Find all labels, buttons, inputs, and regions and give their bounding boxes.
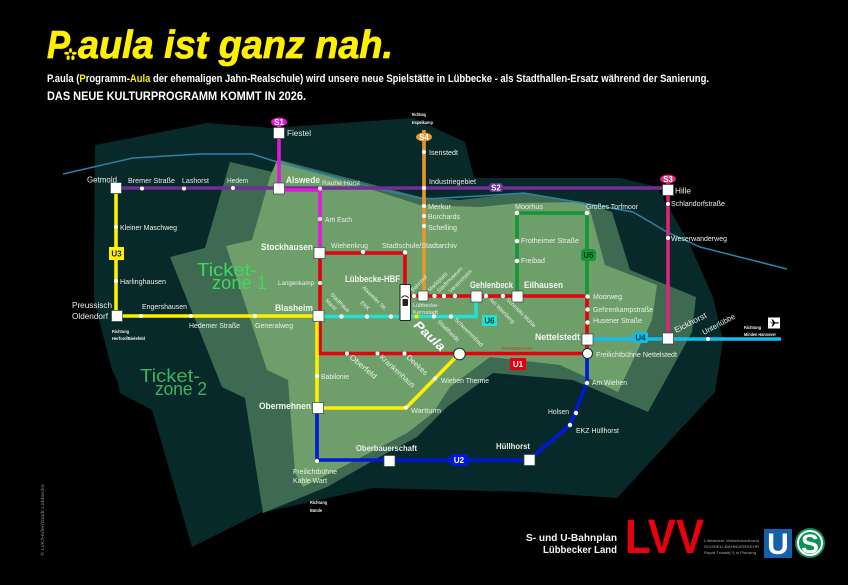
- stations on the western lines: [114, 186, 590, 463]
- label: ticket zone 2: Ticket-: [140, 366, 200, 386]
- operator text: Lübbecker Verkehrsverbund: [704, 538, 759, 543]
- station labels centre: Stadtmuseum: [436, 266, 465, 294]
- map name: [526, 533, 617, 556]
- station labels west: Kleiner Maschweg: [120, 223, 177, 232]
- station labels east: [496, 292, 776, 451]
- station labels centre: Wiehenkrug: [331, 241, 368, 250]
- station labels centre: Deekes: [405, 353, 430, 377]
- station labels west: Lashorst: [182, 176, 210, 185]
- station labels west: Stockhausen: [261, 242, 313, 252]
- station labels east: Gehrenkampstraße: [593, 305, 653, 314]
- map name: Lübbecker Land: [543, 545, 617, 556]
- station labels centre: Am Weinberg: [488, 297, 515, 325]
- station labels centre: Krankenhaus: [378, 353, 417, 390]
- station labels centre: Wiehen Therme: [441, 376, 489, 385]
- label: ticket zone 1: Ticket-: [197, 260, 257, 280]
- station labels centre: Stadthaus: [329, 292, 351, 314]
- line S1 magenta: S1: [274, 118, 284, 127]
- station labels east: Unterlübbe: [701, 312, 737, 337]
- station labels west: Obermehnen: [259, 401, 311, 411]
- operator text: [704, 538, 759, 555]
- line S4 orange: [412, 112, 477, 296]
- line U5 green: Moorhus: [515, 202, 543, 211]
- line U1 red: [320, 253, 587, 370]
- station labels centre: Lübbecke-HBF: [345, 274, 401, 284]
- station labels centre: Vereinsheim: [448, 268, 474, 294]
- station labels west: Herford/Bielefeld: [112, 336, 145, 341]
- station labels centre: Eilhausen: [524, 280, 563, 290]
- interchange stations: [110, 128, 674, 466]
- icon: Lübbecke main station with train: [400, 284, 410, 320]
- station labels centre: Gehlenbeck: [470, 280, 513, 290]
- station labels centre: Wartturm: [411, 406, 441, 415]
- station labels west: Kahle Wart: [293, 476, 328, 485]
- label: ticket zone 1: [197, 260, 267, 293]
- line S4 orange: Merkur: [428, 202, 451, 211]
- station labels east: Nettelstedt: [535, 332, 580, 342]
- line S4 orange: S4: [419, 133, 429, 142]
- title: P: [47, 24, 71, 67]
- title: aula ist ganz nah.: [78, 24, 393, 67]
- line U2 blue: U2: [454, 456, 465, 465]
- station labels west: Freilichtbühne: [293, 467, 337, 476]
- station labels centre: Markt: [324, 298, 338, 312]
- station labels west: Bremer Straße: [128, 176, 175, 185]
- station labels west: [72, 129, 360, 513]
- station labels east: Husener Straße: [593, 316, 642, 325]
- line U3 yellow: [109, 188, 459, 408]
- station labels west: Richtung: [310, 500, 327, 505]
- panel: ticket zone 2 background: [94, 118, 723, 547]
- announcement: DAS NEUE KULTURPROGRAMM KOMMT IN 2026.: [47, 91, 306, 103]
- line U4 light blue: U4: [635, 334, 646, 342]
- station labels east: Freilichtbühne Nettelstedt: [596, 350, 678, 359]
- station labels west: Generalweg: [255, 321, 293, 330]
- river: [63, 154, 787, 269]
- logo: S-Bahn: [795, 528, 825, 559]
- station labels west: Langenkamp: [278, 280, 314, 287]
- copyright: © LvK/Hufer/Stadt Lübbecke: [39, 484, 46, 556]
- station labels east: Eickhorst: [673, 311, 709, 335]
- station labels east: EKZ Hüllhorst: [576, 426, 620, 435]
- station labels east: Moorweg: [593, 292, 622, 301]
- station labels west: Harlinghausen: [120, 277, 166, 286]
- station labels centre: Bahnhof: [410, 274, 429, 293]
- logo: S-Bahn: S: [801, 529, 819, 559]
- line S3 pink: S3: [663, 175, 673, 184]
- line U1 red: RINGBAHN: [502, 346, 533, 352]
- label: P.aula venue: Paula: [411, 318, 448, 354]
- line S4 orange: Schelling: [428, 223, 457, 232]
- line S3 pink: Weserwanderweg: [671, 234, 727, 243]
- station labels west: Engershausen: [142, 302, 187, 311]
- station labels centre: EKK: [359, 300, 371, 312]
- station labels east: Richtung: [744, 325, 761, 330]
- station labels west: Fiestel: [287, 129, 311, 138]
- line U1 red: U1: [513, 360, 524, 369]
- line U5 green: Frotheimer Straße: [521, 236, 579, 245]
- operator text: SCHNELLBAHNVERKEHR: [704, 544, 759, 549]
- station labels east: Minden Hannover: [744, 332, 776, 337]
- line U6 cyan: [319, 296, 497, 326]
- line U6 cyan: U6: [484, 316, 495, 326]
- station labels east: Am Wiehen: [592, 378, 627, 387]
- panel: ticket zone 1 outer: [170, 160, 696, 513]
- line U5 green: [515, 202, 638, 296]
- station labels west: Rauhe Horst: [322, 180, 360, 187]
- line S3 pink: Hille: [675, 186, 692, 196]
- label: ticket zone 1: zone 1: [212, 273, 267, 293]
- line S4 orange: Industriegebiet: [429, 177, 477, 186]
- line S3 pink: [660, 174, 727, 338]
- station labels west: Preussisch: [72, 301, 112, 310]
- station labels east: Hüllhorst: [496, 442, 530, 451]
- operator text: Rapid Transit(?) in Planung: [704, 550, 756, 555]
- station labels west: Am Esch: [325, 215, 352, 224]
- station labels west: Getmold: [87, 176, 117, 184]
- line S1 magenta: [271, 118, 320, 253]
- intro text: P.aula (Programm-Aula der ehemaligen Jahn-Realschule) wird unsere neue Spielstätte in Lübbecke - als Stadthallen-Ersatz während der Sanierung.: [47, 73, 709, 85]
- station labels centre: Alsweder Str.: [361, 285, 388, 313]
- station labels centre: Schwemmbad: [453, 317, 484, 348]
- label: ticket zone 2: [140, 366, 207, 399]
- icon: airport: [768, 318, 780, 328]
- line S4 orange: Espelkamp: [412, 120, 433, 125]
- map name: S- und U-Bahnplan: [526, 533, 617, 544]
- line U4 light blue: [587, 332, 781, 343]
- station labels centre: Stadtheide: [436, 319, 461, 344]
- station labels east: Holsen: [548, 407, 569, 416]
- station labels west: Bünde: [310, 508, 322, 513]
- logo: U-Bahn: U: [767, 528, 789, 561]
- line U5 green: U5: [583, 251, 594, 260]
- station labels west: Hedem: [227, 176, 248, 185]
- line S3 pink: Schlandorfstraße: [671, 199, 725, 208]
- station labels west: Alswede: [286, 175, 320, 185]
- line S4 orange: Borchards: [428, 212, 460, 221]
- station labels west: Blasheim: [275, 303, 313, 313]
- station labels centre: Stadtschule/Stadtarchiv: [382, 241, 457, 250]
- icon: flower dot: [64, 48, 77, 60]
- line U5 green: Großes Torfmoor: [586, 202, 638, 211]
- station labels centre: Lübbecke-: [413, 303, 439, 309]
- station labels centre: Marktplatz: [427, 271, 450, 293]
- station labels centre: [324, 241, 563, 453]
- line S2 purple: S2: [491, 184, 501, 192]
- station labels west: Babilonie: [321, 372, 349, 381]
- station labels west: Richtung: [112, 329, 129, 334]
- station labels centre: Oberfeld: [348, 353, 379, 381]
- line U5 green: Freibad: [521, 256, 545, 265]
- line S4 orange: Richtung: [412, 112, 426, 117]
- logo: LVV: LVV: [625, 511, 704, 564]
- station labels centre: Kernstadt: [413, 310, 438, 316]
- line U2 blue: [317, 354, 587, 466]
- line U3 yellow: U3: [111, 250, 122, 258]
- station labels centre: Schmidts Mühle: [505, 297, 537, 329]
- station labels centre: Oberbauerschaft: [356, 444, 417, 453]
- station labels west: Hedemer Straße: [189, 321, 240, 330]
- station labels west: Oldendorf: [72, 312, 109, 321]
- panel: ticket zone 1 inner: [226, 160, 657, 487]
- line S2 purple: [116, 183, 668, 192]
- line S4 orange: Isenstedt: [429, 148, 459, 157]
- label: ticket zone 2: zone 2: [155, 379, 207, 399]
